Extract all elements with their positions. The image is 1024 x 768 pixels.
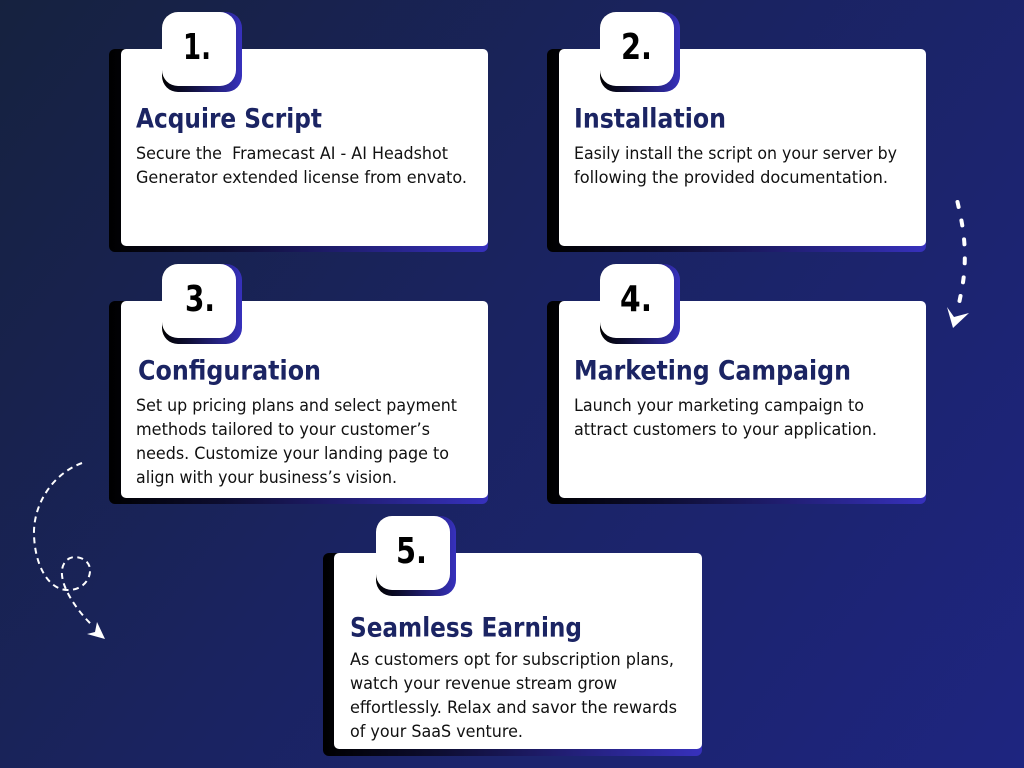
text: step 3 description: methods tailored to your customer’s <box>136 420 430 440</box>
badge: number 5 <box>376 516 456 596</box>
text: step 2 description: following the provided documentation. <box>574 168 888 188</box>
text: step 5 description <box>350 650 677 742</box>
heading: seamless earning: Seamless Earning <box>350 612 582 644</box>
panel: step 4 marketing campaign <box>547 264 926 504</box>
text: step 3 description: align with your business’s vision. <box>136 468 397 488</box>
badge: number 3: 3. <box>185 279 215 320</box>
text: step 3 description <box>136 396 457 488</box>
panel: step 1 acquire script <box>109 12 488 252</box>
badge: number 2: 2. <box>621 27 652 68</box>
badge: number 3 <box>162 264 242 344</box>
text: step 3 description: Set up pricing plans and select payment <box>136 396 457 416</box>
badge: number 1: 1. <box>183 27 211 68</box>
heading: configuration: Configuration <box>138 356 321 386</box>
text: step 5 description: As customers opt for subscription plans, <box>350 650 674 670</box>
text: step 4 description <box>574 396 877 440</box>
text: step 4 description: attract customers to your application. <box>574 420 877 440</box>
text: step 1 description <box>136 144 467 188</box>
heading: acquire script: Acquire Script <box>136 104 322 134</box>
text: step 5 description: of your SaaS venture. <box>350 722 523 742</box>
badge: number 4: 4. <box>620 279 652 320</box>
arrow: dashed right arrow <box>947 202 969 328</box>
text: step 5 description: effortlessly. Relax and savor the rewards <box>350 698 677 718</box>
badge: number 1 <box>162 12 242 92</box>
arrow: dashed looping left arrow <box>34 463 105 639</box>
text: step 1 description: Secure the Framecast AI - AI Headshot <box>136 144 448 164</box>
text: step 1 description: Generator extended license from envato. <box>136 168 467 188</box>
panel: step 2 installation <box>547 12 926 252</box>
panel: step 5 seamless earning <box>323 516 702 756</box>
text: step 2 description <box>574 144 897 188</box>
text: step 5 description: watch your revenue stream grow <box>350 674 617 694</box>
badge: number 5: 5. <box>396 531 427 572</box>
panel: step 3 configuration <box>109 264 488 504</box>
text: step 3 description: needs. Customize your landing page to <box>136 444 449 464</box>
heading: marketing campaign: Marketing Campaign <box>574 356 851 386</box>
heading: installation: Installation <box>574 104 726 134</box>
badge: number 4 <box>600 264 680 344</box>
badge: number 2 <box>600 12 680 92</box>
text: step 2 description: Easily install the script on your server by <box>574 144 897 164</box>
text: step 4 description: Launch your marketing campaign to <box>574 396 864 416</box>
